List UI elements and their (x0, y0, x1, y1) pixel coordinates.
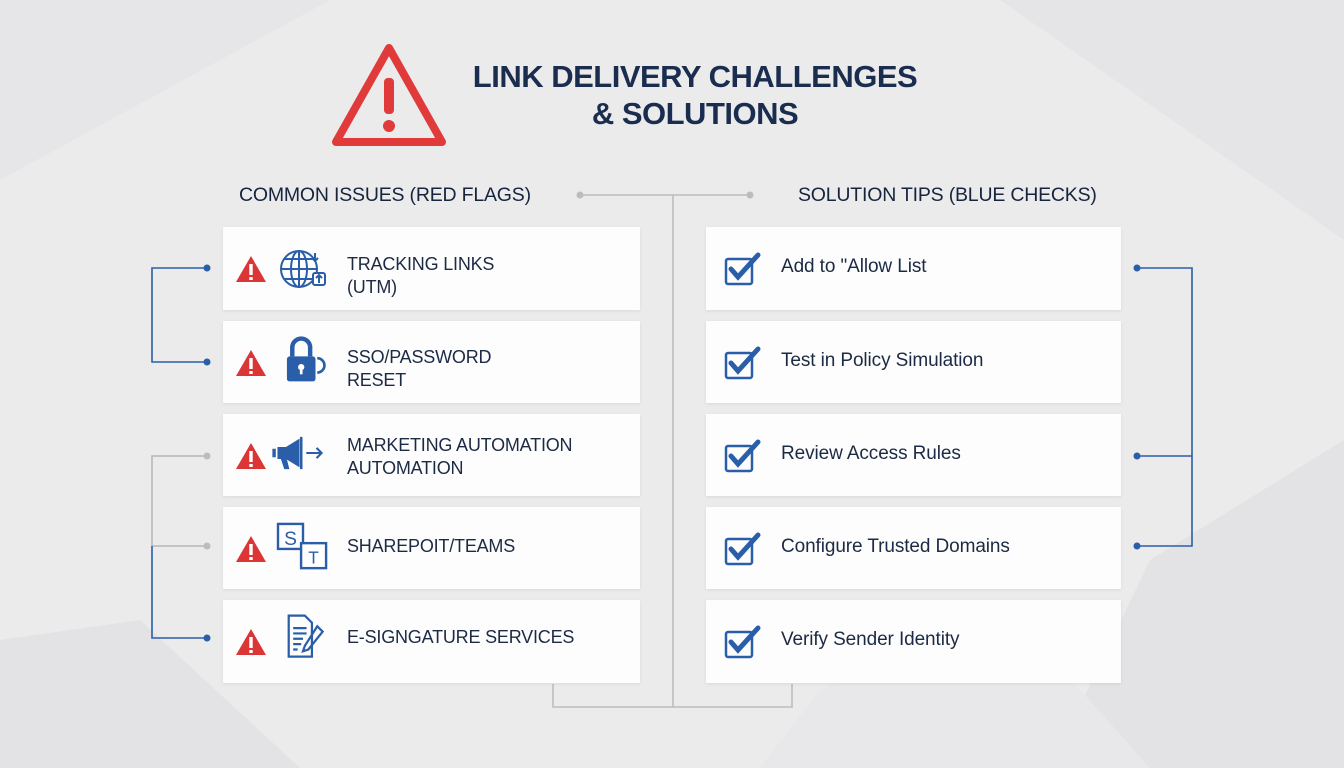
panel: issue 5 (223, 600, 640, 683)
panel: tip 1 (706, 227, 1121, 310)
panel: issue 2: RESET (347, 370, 406, 390)
panel: tip 5 (706, 600, 1121, 683)
panel: issue 1 (223, 227, 640, 310)
icon: S T boxes: T (308, 547, 319, 567)
panel: issue 2: SSO/PASSWORD (347, 347, 491, 367)
panel: issue 1: (UTM) (347, 277, 397, 297)
panel: tip 3: Review Access Rules (781, 443, 961, 464)
icon: globe (280, 250, 326, 288)
panel: issue 3 (223, 414, 640, 496)
icon: megaphone (272, 436, 323, 470)
panel: tip 4: Configure Trusted Domains (781, 536, 1010, 557)
icon: S T boxes (276, 522, 328, 570)
icon: document with pen (288, 614, 324, 658)
title (473, 59, 917, 131)
panel: tip 2 (706, 321, 1121, 403)
panel: issue 5: E-SIGNGATURE SERVICES (347, 627, 574, 647)
heading: common issues: COMMON ISSUES (RED FLAGS) (239, 184, 531, 206)
title: LINK DELIVERY CHALLENGES (473, 59, 917, 94)
title: & SOLUTIONS (592, 96, 798, 131)
panel: issue 4 (223, 507, 640, 589)
panel: issue 1: TRACKING LINKS (347, 254, 494, 274)
panel: tip 5: Verify Sender Identity (781, 629, 959, 650)
panel: issue 2 (223, 321, 640, 403)
panel: tip 2: Test in Policy Simulation (781, 350, 983, 371)
icon: S T boxes: S (284, 529, 297, 550)
icon: big warning triangle (332, 44, 446, 146)
panel: issue 4: SHAREPOIT/TEAMS (347, 536, 515, 556)
heading: solution tips: SOLUTION TIPS (BLUE CHECKS) (798, 184, 1097, 206)
panel: issue 3: AUTOMATION (347, 458, 463, 478)
panel: tip 4 (706, 507, 1121, 589)
panel: tip 1: Add to "Allow List (781, 256, 926, 277)
icon: padlock (286, 336, 326, 382)
panel: tip 3 (706, 414, 1121, 496)
panel: issue 3: MARKETING AUTOMATION (347, 435, 572, 455)
